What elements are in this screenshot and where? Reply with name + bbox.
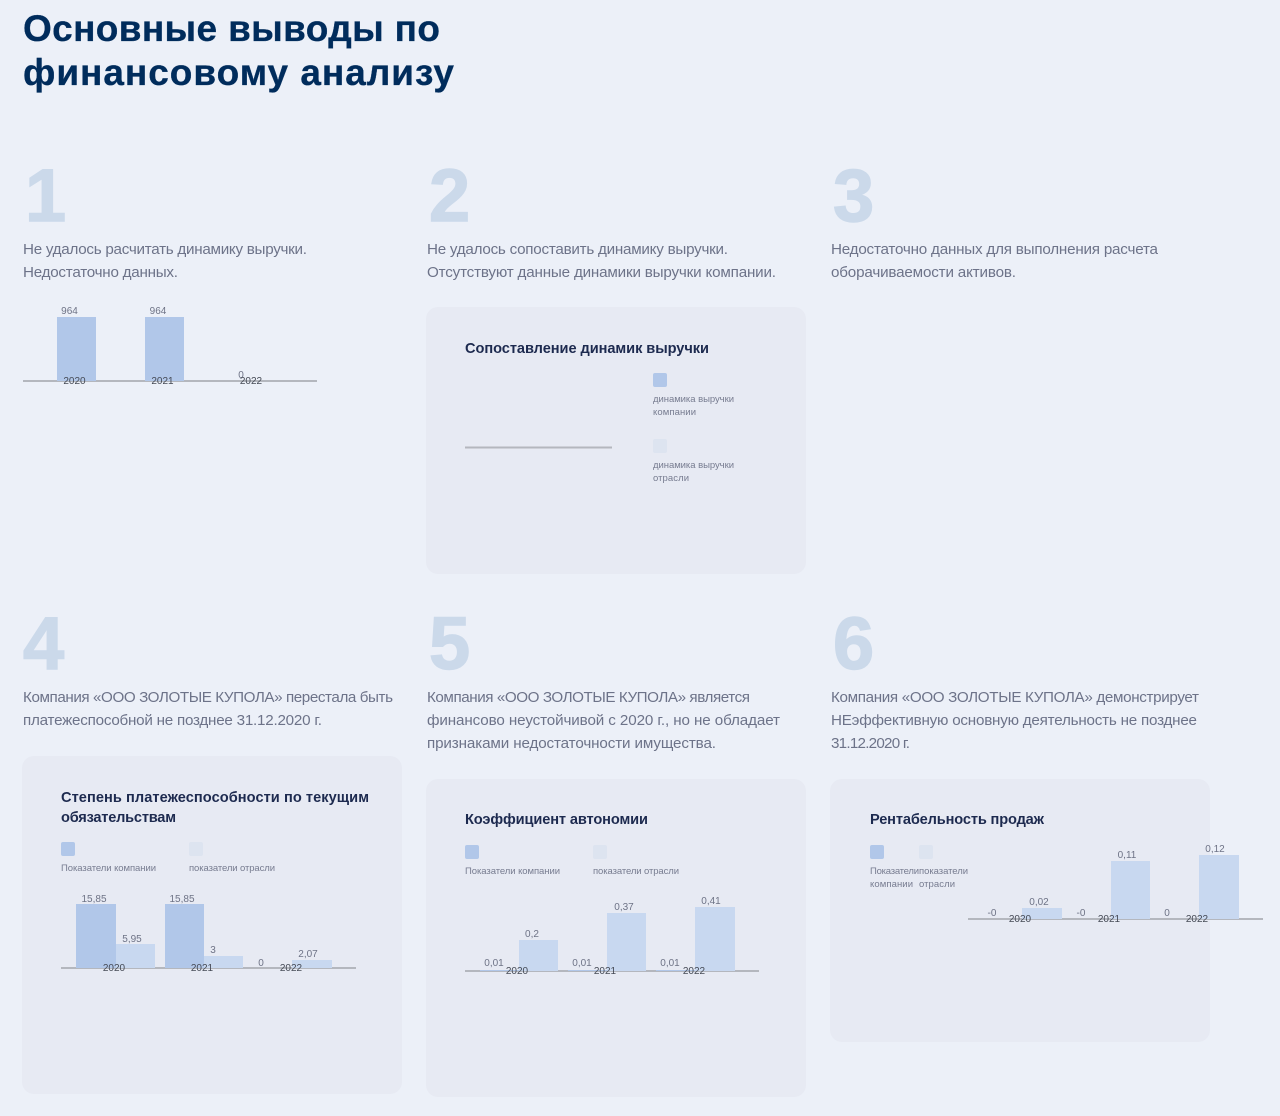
bar chart: return on sales: -0 [988, 908, 997, 919]
bar chart: autonomy: 2020 [506, 966, 529, 977]
legend: industry [653, 439, 734, 484]
bar chart: revenue: 2021 [151, 376, 174, 387]
legend: industry: отрасли [919, 879, 955, 890]
legend: company: компании [653, 407, 696, 418]
bar chart: solvency: 15,85 [81, 894, 107, 905]
bar chart: revenue: 0 [238, 370, 244, 381]
legend: industry [189, 842, 275, 874]
text block 4: Компания «ООО ЗОЛОТЫЕ КУПОЛА» перестала быть [23, 689, 393, 706]
legend: company: Показатели [870, 866, 919, 877]
panel heading [61, 790, 369, 826]
empty chart axis [465, 446, 612, 448]
section 4 [22, 602, 402, 1094]
bar chart: autonomy: 0,01 [660, 958, 680, 969]
text block 2 [427, 241, 776, 281]
panel: return on sales [830, 779, 1263, 1042]
bar chart: solvency: 5,95 [122, 934, 142, 945]
text block 5: Компания «ООО ЗОЛОТЫЕ КУПОЛА» является [427, 689, 750, 706]
bar chart: autonomy: 2021 [594, 966, 617, 977]
section 5 [426, 602, 806, 1097]
text block 4 [23, 689, 393, 729]
bar chart: autonomy: 0,2 [525, 929, 539, 940]
panel: solvency [22, 756, 402, 1094]
panel heading: Коэффициент автономии [465, 812, 648, 828]
panel: autonomy ratio [426, 779, 806, 1097]
text block 1 [23, 241, 307, 281]
text block 3 [831, 241, 1159, 281]
bar chart: solvency: 3 [210, 945, 216, 956]
bar chart: solvency: 2020 [103, 963, 126, 974]
number 4: 4 [23, 602, 64, 685]
bar chart: solvency: 2022 [280, 963, 303, 974]
text block 5 [427, 689, 780, 752]
text block 2: Отсутствуют данные динамики выручки компании. [427, 264, 776, 281]
bar chart: revenue: 964 [150, 306, 167, 317]
bar chart: return on sales: 2020 [1009, 914, 1032, 925]
text block 1: Не удалось расчитать динамику выручки. [23, 241, 307, 258]
legend: industry: отрасли [653, 473, 689, 484]
text block 5: признаками недостаточности имущества. [427, 735, 716, 752]
bar chart: return on sales: 0,12 [1205, 844, 1225, 855]
bar chart: solvency: 2021 [191, 963, 214, 974]
bar chart: revenue: 2022 [240, 376, 263, 387]
bar chart: autonomy: 0,41 [701, 896, 721, 907]
section 3 [831, 154, 1159, 281]
panel heading: обязательствам [61, 810, 176, 826]
title: Основные выводы по [23, 8, 440, 49]
bar chart: autonomy: 0,01 [572, 958, 592, 969]
legend: company [870, 845, 919, 890]
legend: company: Показатели компании [61, 863, 156, 874]
number 2: 2 [429, 154, 470, 237]
panel heading: Сопоставление динамик выручки [465, 341, 709, 357]
bar chart: return on sales: -0 [1077, 908, 1086, 919]
legend: industry [593, 845, 679, 877]
text block 6 [831, 689, 1199, 752]
legend: industry: показатели [919, 866, 968, 877]
bar chart: return on sales: 2021 [1098, 914, 1121, 925]
text block 2: Не удалось сопоставить динамику выручки. [427, 241, 728, 258]
text block 6: Компания «ООО ЗОЛОТЫЕ КУПОЛА» демонстрирует [831, 689, 1199, 706]
text block 4: платежеспособной не позднее 31.12.2020 г. [23, 712, 322, 729]
legend: company: компании [870, 879, 913, 890]
text block 6: 31.12.2020 г. [831, 735, 910, 752]
number 1: 1 [25, 154, 66, 237]
legend: company [61, 842, 156, 874]
bar chart: solvency: 2,07 [298, 949, 318, 960]
legend: industry [919, 845, 968, 890]
bar chart: solvency: 15,85 [169, 894, 195, 905]
panel: revenue comparison [426, 307, 806, 574]
panel heading: Степень платежеспособности по текущим [61, 790, 369, 806]
bar chart: return on sales: 0 [1164, 908, 1170, 919]
number 3: 3 [833, 154, 874, 237]
bar chart: solvency: 0 [258, 958, 264, 969]
bar chart: autonomy [465, 896, 759, 977]
bar chart: return on sales: 0,11 [1118, 850, 1137, 861]
bar chart: return on sales [968, 844, 1263, 925]
text block 1: Недостаточно данных. [23, 264, 178, 281]
bar chart: revenue: 964 [61, 306, 78, 317]
bar chart: revenue [23, 306, 317, 387]
legend: company: динамика выручки [653, 394, 734, 405]
bar chart: return on sales: 2022 [1186, 914, 1209, 925]
legend: industry: показатели отрасли [189, 863, 275, 874]
title [23, 8, 454, 93]
legend: industry: показатели отрасли [593, 866, 679, 877]
bar chart: autonomy: 2022 [683, 966, 706, 977]
number 5: 5 [429, 602, 470, 685]
bar chart: autonomy: 0,01 [484, 958, 504, 969]
legend: company [465, 845, 560, 877]
bar chart: solvency [61, 894, 356, 974]
bar chart: autonomy: 0,37 [614, 902, 634, 913]
bar chart: return on sales: 0,02 [1029, 897, 1049, 908]
text block 6: НЕэффективную основную деятельность не позднее [831, 712, 1197, 729]
text block 3: Недостаточно данных для выполнения расчета [831, 241, 1159, 258]
text block 3: оборачиваемости активов. [831, 264, 1016, 281]
legend: company [653, 373, 734, 418]
panel heading: Рентабельность продаж [870, 812, 1045, 828]
number 6: 6 [833, 602, 874, 685]
text block 5: финансово неустойчивой с 2020 г., но не обладает [427, 712, 780, 729]
title: финансовому анализу [23, 52, 454, 93]
section 6 [830, 602, 1263, 1042]
section 2 [426, 154, 806, 574]
bar chart: revenue: 2020 [63, 376, 86, 387]
legend: industry: динамика выручки [653, 460, 734, 471]
section 1 [23, 154, 317, 387]
legend: company: Показатели компании [465, 866, 560, 877]
